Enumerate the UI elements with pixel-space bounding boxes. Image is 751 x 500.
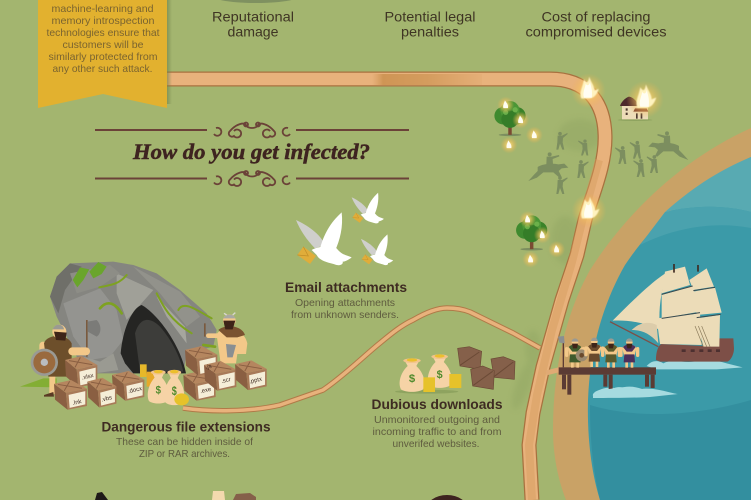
cave rock — [50, 262, 217, 373]
crates: .exe — [200, 387, 213, 395]
caption: dubious downloads: Unmonitored outgoing and — [374, 414, 500, 426]
ribbon text: technologies ensure that — [46, 27, 160, 39]
top arc of previous illustration — [208, 0, 304, 3]
viking with axe and shield — [31, 320, 100, 397]
ship sails — [613, 267, 722, 347]
consequence labels: damage — [228, 24, 279, 40]
ribbon text: similarly protected from — [48, 51, 158, 63]
pier wave — [593, 387, 677, 397]
caption: dubious downloads: Dubious downloads — [372, 396, 503, 412]
heading: How do you get infected? — [132, 139, 370, 164]
soldier silhouettes — [528, 131, 688, 194]
icon: money bags and crates — [395, 347, 515, 394]
caption: email attachments: Opening attachments — [295, 297, 395, 309]
partial bottom illustrations — [95, 491, 468, 500]
main road — [165, 74, 605, 500]
ribbon panel — [38, 0, 172, 108]
crates: .js — [205, 364, 212, 371]
branch road to cave — [183, 308, 562, 411]
trees — [494, 101, 526, 136]
consequence labels: compromised devices — [526, 24, 666, 40]
illustration: cave with vikings and file crates — [20, 262, 267, 410]
ribbon text: any other such attack. — [52, 63, 152, 75]
crates — [54, 346, 267, 410]
consequence labels: Cost of replacing — [542, 8, 650, 24]
crates: .lnk — [72, 399, 82, 407]
burning house — [618, 97, 652, 121]
consequence labels — [212, 8, 666, 40]
illustration: burning countryside with soldiers — [494, 73, 688, 268]
caption: dubious downloads: incoming traffic to and from — [372, 426, 502, 438]
caption: dangerous file extensions: Dangerous file extensions — [102, 418, 271, 434]
caption: email attachments: Email attachments — [285, 279, 407, 295]
flames — [497, 73, 664, 268]
ship hull — [656, 338, 734, 362]
cave mouth — [121, 305, 186, 373]
money bags — [140, 364, 189, 405]
caption: dubious downloads: unverifed websites. — [392, 438, 480, 450]
pier — [559, 367, 656, 395]
ship wave — [647, 361, 743, 369]
crates: .scr — [221, 377, 231, 385]
sea and beach — [553, 128, 751, 500]
caption: dangerous file extensions: These can be hidden inside of — [116, 436, 253, 448]
crates: .docx — [127, 386, 143, 395]
consequence labels: penalties — [401, 24, 459, 40]
icon: white doves carrying letters — [296, 193, 393, 265]
heading with ornaments — [95, 122, 409, 186]
trampled grass shading — [508, 119, 602, 412]
crates: .xlsx — [81, 373, 94, 382]
crates: .pptx — [249, 377, 263, 385]
vikings on pier — [558, 336, 639, 368]
ribbon text — [46, 3, 160, 75]
caption: dangerous file extensions — [102, 418, 271, 460]
ribbon text: machine-learning and — [52, 3, 154, 15]
caption: dubious downloads — [372, 396, 503, 450]
water wave — [593, 387, 678, 398]
crates: .vbs — [101, 395, 113, 404]
viking with hammer — [204, 313, 247, 363]
moss — [99, 275, 215, 347]
ribbon text: customers will be — [62, 39, 144, 51]
illustration: longship, pier and vikings — [558, 264, 743, 397]
caption: email attachments — [285, 279, 407, 321]
consequence labels: Potential legal — [384, 8, 476, 24]
caption: email attachments: from unknown senders. — [291, 309, 399, 321]
ribbon text: memory introspection — [52, 15, 155, 27]
consequence labels: Reputational — [212, 8, 294, 24]
caption: dangerous file extensions: ZIP or RAR archives. — [139, 448, 230, 460]
